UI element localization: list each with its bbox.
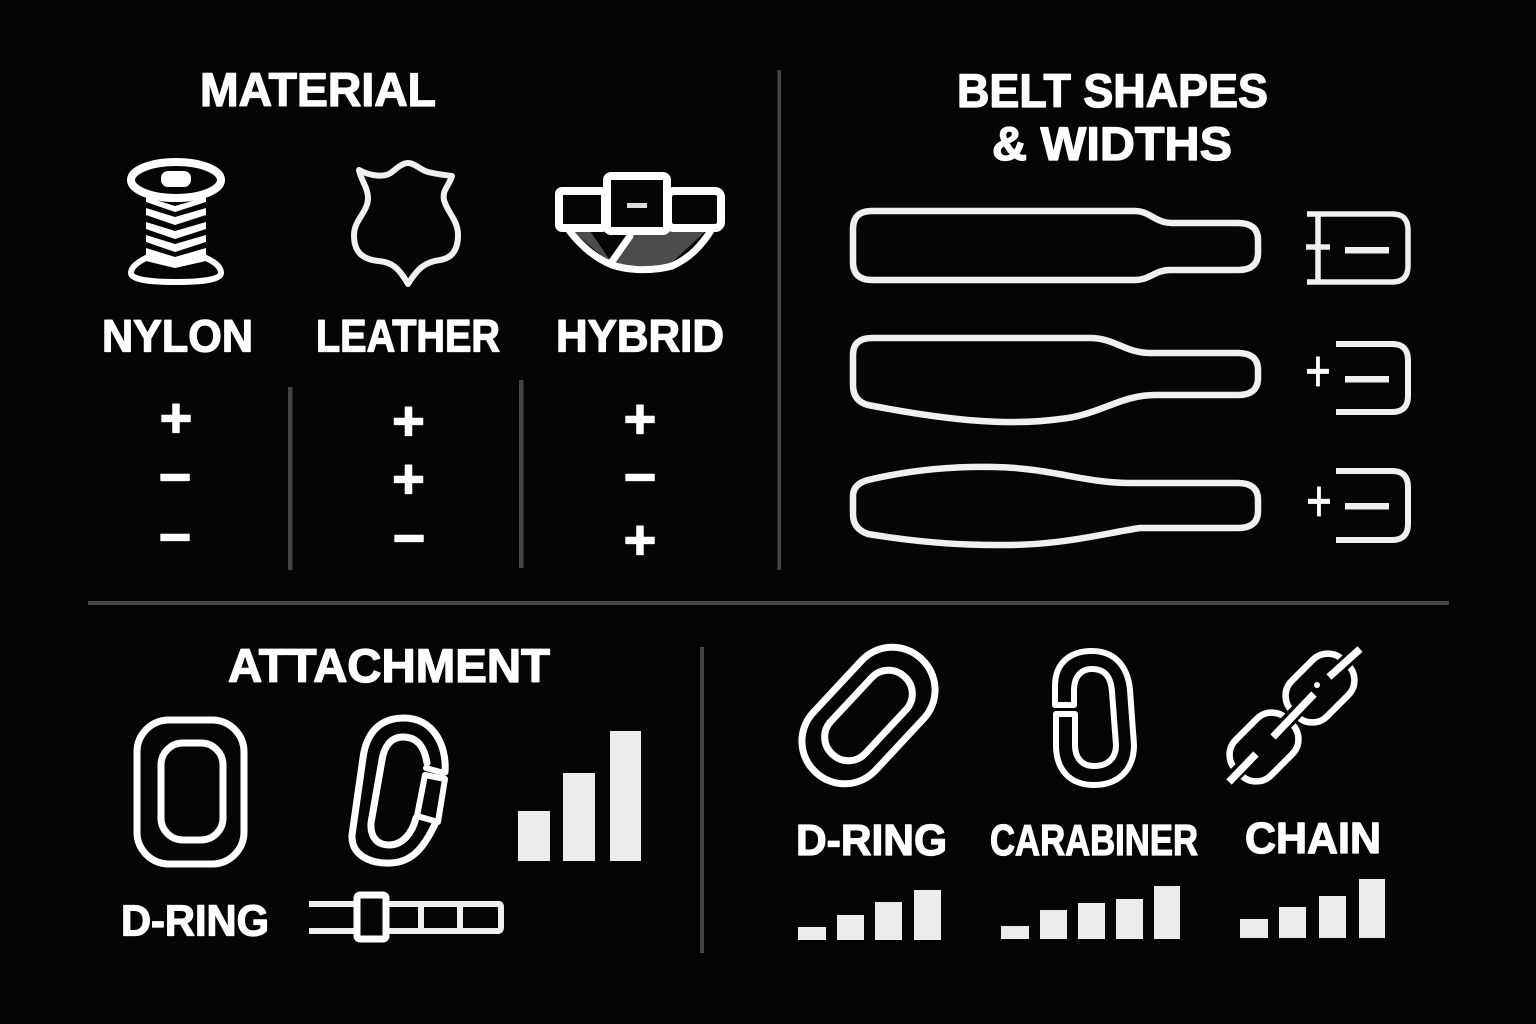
- icon: d-ring: [137, 720, 244, 864]
- heading: attachment: ATTACHMENT: [228, 639, 550, 692]
- hybrid ratings: [624, 387, 656, 571]
- buckle: open with plus: [1305, 339, 1408, 412]
- belt shape: lower curve: [853, 338, 1258, 422]
- leather ratings: [392, 389, 425, 569]
- bar chart: carabiner: [1001, 886, 1180, 939]
- icon: open carabiner: [1055, 651, 1134, 785]
- label: d-ring: D-RING: [121, 896, 269, 946]
- belt shape: full curve: [853, 467, 1258, 545]
- leather ratings: +: [392, 447, 425, 510]
- belt shape: straight: [853, 211, 1258, 280]
- nylon ratings: −: [159, 445, 191, 508]
- leather ratings: +: [392, 389, 425, 452]
- panel: attachment comparison: [785, 630, 1385, 940]
- panel: attachment: [121, 639, 641, 946]
- icon: carabiner: [352, 718, 445, 863]
- nylon ratings: [159, 386, 192, 568]
- icon: hybrid belt and buckle: [559, 176, 721, 270]
- hybrid ratings: −: [624, 445, 656, 508]
- bar chart: chain: [1240, 879, 1385, 938]
- panel: belt shapes and widths: [853, 64, 1408, 545]
- label: carabiner: CARABINER: [990, 816, 1198, 865]
- bar chart: d-ring: [798, 890, 941, 940]
- icon: strap with buckle: [309, 895, 501, 939]
- panel: material: [102, 63, 724, 571]
- icon: leather hide: [354, 163, 458, 284]
- nylon ratings: −: [159, 505, 191, 568]
- label: leather: LEATHER: [316, 310, 500, 362]
- heading: belt shapes and widths: [957, 64, 1268, 170]
- icon: nylon spool: [131, 162, 221, 282]
- label: d-ring: D-RING: [796, 816, 947, 865]
- buckle: open with plus, lower: +: [1306, 469, 1332, 535]
- label: nylon: NYLON: [102, 310, 253, 362]
- buckle: open with plus: +: [1305, 339, 1331, 405]
- heading: belt shapes and widths: BELT SHAPES: [957, 64, 1268, 117]
- nylon ratings: +: [160, 386, 192, 449]
- buckle: open with plus, lower: [1306, 469, 1408, 540]
- icon: chain: [1221, 645, 1363, 790]
- leather ratings: −: [393, 506, 425, 569]
- icon: tilted d-ring: [785, 630, 952, 801]
- label: chain: CHAIN: [1245, 814, 1381, 863]
- hybrid ratings: +: [624, 387, 656, 450]
- bar chart: attachment strength: [518, 731, 641, 861]
- heading: material: MATERIAL: [200, 63, 436, 116]
- buckle: square: [1306, 214, 1408, 282]
- heading: belt shapes and widths: & WIDTHS: [992, 117, 1232, 170]
- hybrid ratings: +: [624, 508, 656, 571]
- label: hybrid: HYBRID: [556, 310, 724, 362]
